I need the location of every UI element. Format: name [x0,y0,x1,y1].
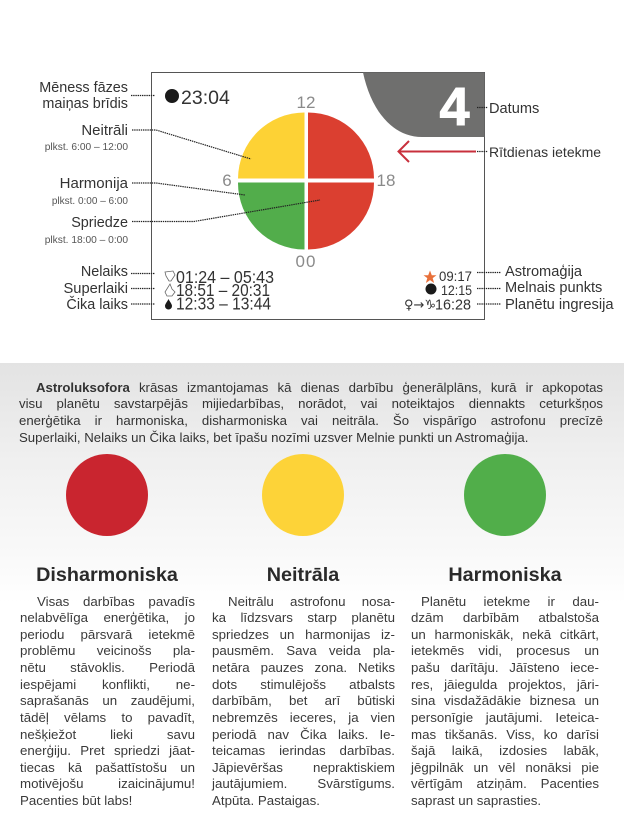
period times with icons: 12:33 – 13:44 [176,294,271,314]
lower section gradient background [0,363,624,825]
column: Neitrāla text: jautājumiem. Svārstīgums. [212,776,395,791]
column: Disharmoniska text: enerģiju. Pret spriedzi jāat- [20,743,195,758]
column: Neitrāla text: netāra pauzes zona. Netiks [212,660,395,675]
column: Disharmoniska text: problēmu veicinošs pla- [20,643,195,658]
column: Neitrāla text: Jāpievēršas nepraktiskiem [212,760,395,775]
column: Disharmoniska text: iespējami konflikti, ne- [20,677,195,692]
column: Harmoniska text: res, jāiegulda projektos, jāri- [411,677,599,692]
column: Harmoniska text: ietekmēs vidi, procesus un [411,643,599,658]
quadrant pie chart [238,112,374,250]
astromagic, black point and ingress times: 16:28 [435,296,471,314]
column: Neitrāla text: ka līdzsvars starp planētu [212,610,395,625]
heading: Neitrāla: Neitrāla [267,564,339,586]
period times with icons: 18:51 – 20:31 [176,280,270,300]
column: Neitrāla text: nebremzēs ieceres, ja vien [212,710,395,725]
column: Neitrāla text: pausmēm. Sava veida pla- [212,643,395,658]
diagram frame [152,72,484,320]
column: Neitrāla text: darbībām, bet arī būtiski [212,693,395,708]
column: Neitrāla text: Atpūta. Pastaigas. [212,793,320,808]
column: Harmoniska text: un harmoniskāk, nekā citkārt, [411,627,599,642]
yellow circle [262,454,344,536]
right labels: Melnais punkts [505,280,602,296]
clock hour labels [222,93,395,271]
moon phase time: 23:04 [181,87,230,109]
green circle [464,454,546,536]
left labels: maiņas brīdis [42,96,128,112]
heading: Disharmoniska: Disharmoniska [36,564,178,586]
intro paragraph [19,380,603,445]
clock hour labels: 18 [377,171,395,190]
column: Harmoniska text: šajā laikā, izdosies labāk, [411,743,599,758]
column: Harmoniska text: pašu darītāju. Jāīsteno iece- [411,660,599,675]
column: Disharmoniska text: Pacenties būt labs! [20,793,132,808]
intro paragraph: Superlaiki, Nelaiks un Čika laiks, bet īpašu nozīmi uzsver Melnie punkti un Astromaģija. [19,430,528,445]
left labels: Čika laiks [66,296,128,313]
left labels: Nelaiks [81,264,128,280]
date corner panel: 4 [439,77,470,137]
column: Neitrāla text [212,594,395,808]
right labels: Rītdienas ietekme [489,144,601,160]
period times with icons: 01:24 – 05:43 [176,267,274,287]
column: Disharmoniska text: periodu pārsvarā ietekmē [20,627,195,642]
column: Harmoniska text: personīgie jautājumi. Ieteica- [411,710,599,725]
column: Neitrāla text: periodā nav Čika laiks. Ie- [212,726,395,742]
left labels: Superlaiki [64,281,128,297]
clock hour labels: 00 [296,252,316,271]
column: Disharmoniska text: tiecas kā pašattīstošu un [20,760,195,775]
date corner panel [363,72,484,137]
clock hour labels: 12 [297,93,315,112]
column: Harmoniska text: Planētu ietekme ir dau- [421,594,599,608]
left labels: Spriedze [71,215,128,231]
left labels: Harmonija [60,175,129,192]
astromagic, black point and ingress times: 12:15 [441,282,472,298]
column: Disharmoniska text: nētu stāvoklis. Periodā [20,660,195,675]
left labels [39,80,129,313]
column: Disharmoniska text: motivējošu izaicinājumu! [20,776,195,791]
astroluxofora diagram [39,72,614,320]
left labels: Neitrāli [81,122,128,139]
column: Harmoniska text: mas tikšanās. Viss, ko darīsi [411,726,599,742]
right labels: Datums [489,101,539,117]
column: Disharmoniska text: tādēļ vēlams to pavadīt, [20,710,195,725]
column: Harmoniska text: sina visdažādākie biznesa un [411,693,599,708]
intro paragraph: visu planētu savstarpējās mijiedarbības, norādot, vai noteiktajos diennakts ceturkšņos [19,396,603,411]
astromagic, black point and ingress times [404,268,472,314]
left labels: Mēness fāzes [39,80,128,96]
column: Disharmoniska text: nelabvēlīga enerģētika, jo [20,610,195,625]
column: Disharmoniska text: Visas darbības pavadīs [37,594,195,608]
intro paragraph: Astroluksofora krāsas izmantojamas kā dienas darbību ģenerālplāns, kurā ir apkopotas [36,380,603,395]
period times with icons [165,267,274,314]
right labels: Astromaģija [505,264,583,280]
heading: Harmoniska: Harmoniska [448,564,562,586]
right labels [489,101,614,313]
left labels: plkst. 0:00 – 6:00 [52,196,128,207]
column: Harmoniska text: vērtīgām atziņām. Pacenties [411,776,599,791]
tomorrow influence arrow [398,141,476,162]
astromagic, black point and ingress times: 09:17 [439,268,472,284]
dotted leader lines [131,96,501,304]
column: Disharmoniska text [20,594,195,808]
column: Harmoniska text: dzām darbībām atbalstoša [411,610,599,625]
column: Disharmoniska text: saprašanās un zaudējumi, [20,693,195,708]
column: Neitrāla text: dots stimulējošs atbalsts [212,677,395,692]
astromagic, black point and ingress times: ♀→♑ [404,298,436,313]
left labels: plkst. 18:00 – 0:00 [45,235,128,246]
intro paragraph: enerģētika ir harmoniska, disharmoniska vai neitrāla. Šo vispārīgo astrofonu precīzē [19,413,603,428]
clock hour labels: 6 [222,171,232,190]
left labels: plkst. 6:00 – 12:00 [45,142,128,153]
column: Harmoniska text: saprast un saprasties. [411,793,541,808]
column: Harmoniska text [410,594,599,808]
column: Neitrāla text: spriedzes un harmonijas iz- [212,627,395,642]
column: Disharmoniska text: nešķiežot lieki savu [20,726,195,742]
column: Neitrāla text: Neitrālu astrofonu nosa- [228,594,395,608]
right labels: Planētu ingresija [505,297,614,313]
column: Neitrāla text: teicamas ierindas darbības. [212,743,395,758]
column: Harmoniska text: jēgpilnāk un vēl nonāksi pie [411,760,599,775]
red circle [66,454,148,536]
